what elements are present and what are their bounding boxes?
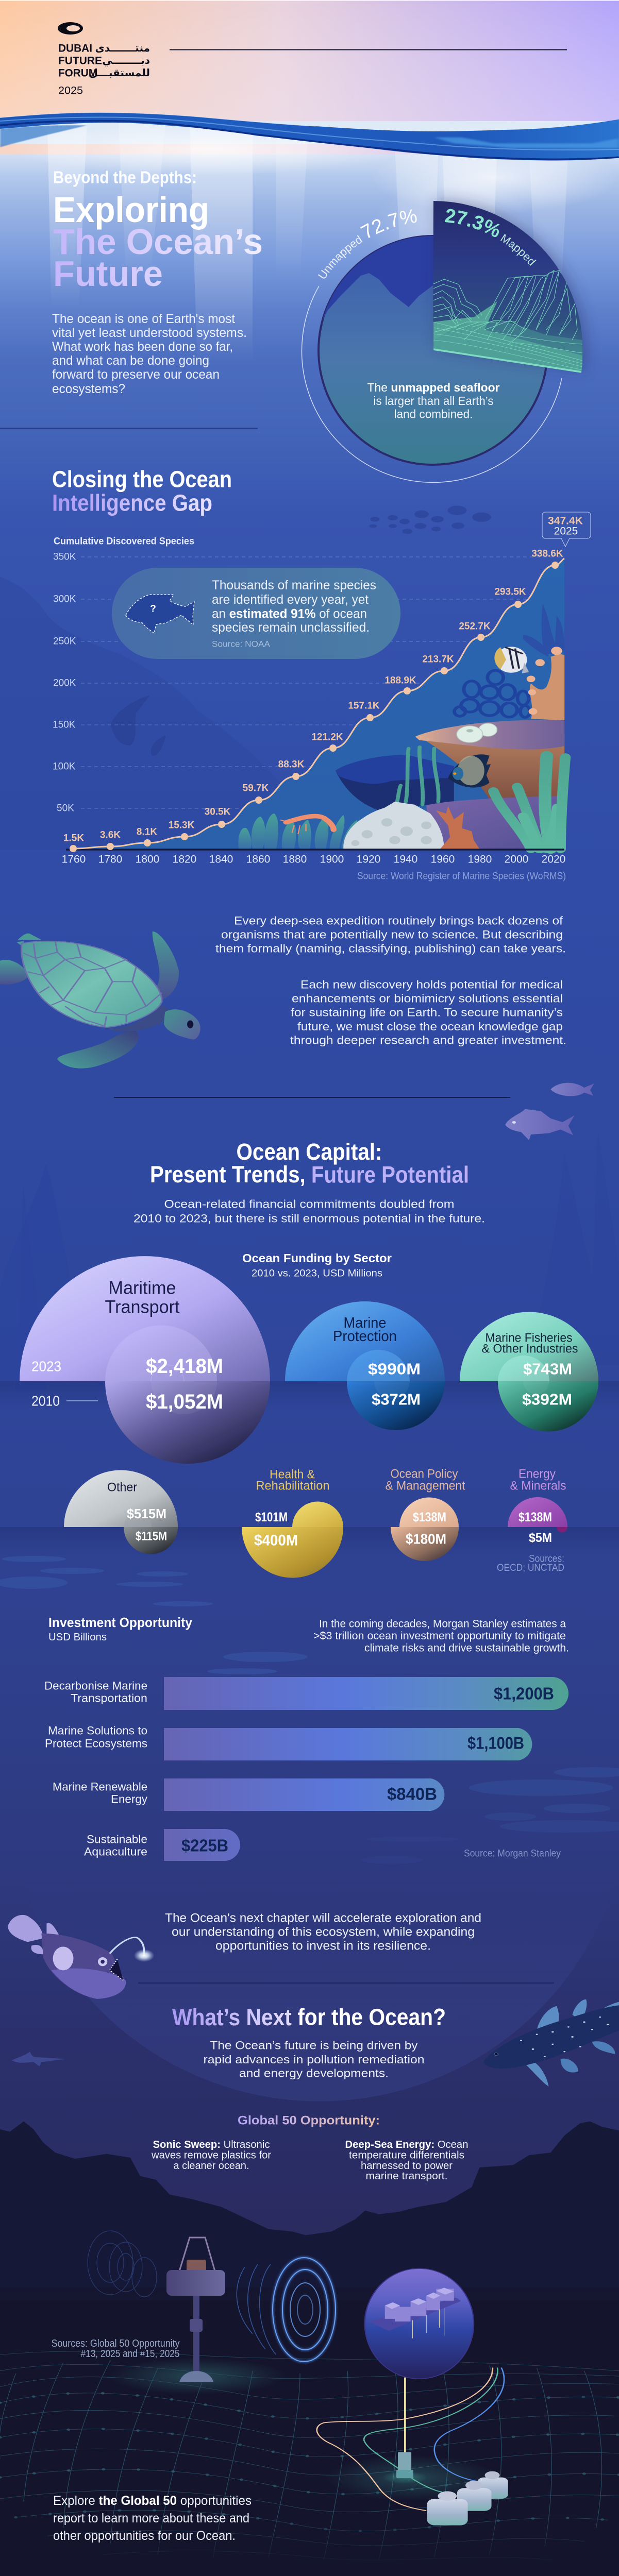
- light rays: [47, 123, 568, 363]
- title block: Beyond the Depths:: [53, 168, 197, 187]
- cables: [317, 2368, 504, 2511]
- reef illustration: [238, 603, 565, 849]
- bar: renewable energy: $840B: [387, 1785, 437, 1803]
- x axis labels: 1920: [357, 853, 380, 866]
- value labels: 59.7K: [243, 783, 269, 793]
- title block: The Ocean’s: [53, 222, 263, 262]
- bar: aquaculture: Aquaculture: [84, 1845, 147, 1858]
- x axis labels: 1780: [98, 853, 122, 866]
- callout text: are identified every year, yet: [212, 592, 369, 607]
- bubble: marine fisheries: Marine Fisheries: [486, 1331, 572, 1345]
- bubble: energy and minerals: Energy: [518, 1467, 556, 1481]
- title block: Future: [53, 253, 163, 294]
- x axis labels: 1980: [468, 853, 492, 866]
- illustration: deep-sea energy: [317, 2268, 508, 2526]
- faint clouds of silt: [0, 1556, 619, 1864]
- bubble: marine protection: Protection: [333, 1328, 397, 1345]
- value labels: 88.3K: [278, 759, 305, 770]
- bubble: maritime transport: Maritime: [108, 1278, 176, 1298]
- explore text: report to learn more about these and: [53, 2511, 249, 2526]
- logo: Dubai Future Forum 2025: [58, 22, 150, 97]
- x axis labels: 2000: [505, 853, 528, 866]
- background rock silhouette: [0, 577, 304, 850]
- y axis labels: 250K: [53, 636, 76, 647]
- bubble: health and rehabilitation: Rehabilitation: [256, 1479, 330, 1493]
- opportunity sources: Sources: Global 50 Opportunity: [52, 2338, 179, 2349]
- central column: [382, 2452, 427, 2484]
- value labels: 121.2K: [311, 732, 343, 743]
- bubble: marine fisheries: & Other Industries: [481, 1342, 578, 1356]
- sensor box: [187, 2260, 206, 2271]
- value labels: 15.3K: [169, 820, 195, 831]
- value labels: 252.7K: [459, 621, 491, 632]
- opportunity: sonic sweep: Sonic Sweep: Ultrasonic: [153, 2139, 270, 2150]
- year bands: [0, 1381, 619, 1410]
- bubble: maritime transport: $1,052M: [146, 1391, 223, 1413]
- sea urchins: [457, 723, 497, 742]
- discovery text: for sustaining life on Earth. To secure humanity’s: [291, 1006, 563, 1019]
- underwater surface glow: [0, 121, 619, 289]
- value labels: 338.6K: [531, 548, 563, 560]
- bar source: Source: Morgan Stanley: [464, 1849, 561, 1859]
- illustration: sonic sweep buoy: [88, 2231, 336, 2382]
- bubble: health and rehabilitation: [242, 1467, 343, 1578]
- callout text: Source: NOAA: [212, 639, 271, 649]
- bubble: other: $515M: [127, 1506, 166, 1521]
- tube sponges: [493, 756, 565, 849]
- bubble: maritime transport: $2,418M: [146, 1355, 223, 1378]
- transition text: opportunities to invest in its resilience.: [215, 1939, 431, 1953]
- bar: marine solutions: [45, 1724, 532, 1760]
- section heading: ocean capital: Present Trends, Future Potential: [150, 1161, 469, 1188]
- sky header: [0, 0, 619, 155]
- funding sources: OECD; UNCTAD: [497, 1563, 564, 1573]
- discovery text: them formally (naming, classifying, publishing) can take years.: [215, 942, 566, 955]
- bubble: marine protection: [285, 1301, 445, 1430]
- bubble: ocean policy and management: Ocean Policy: [391, 1467, 458, 1481]
- deep background: [0, 2287, 619, 2576]
- opportunity: sonic sweep: waves remove plastics for: [151, 2149, 271, 2161]
- bubble: maritime transport: [20, 1256, 270, 1464]
- section heading: ocean capital: 2010 to 2023, but there is still enormous potential in the future.: [133, 1212, 485, 1225]
- intro paragraph: vital yet least understood systems.: [52, 326, 247, 340]
- seafloor mesh: [0, 2351, 619, 2560]
- x axis labels: 1820: [173, 853, 196, 866]
- mesh glow: [325, 2455, 500, 2501]
- mapped wedge: [433, 200, 586, 374]
- sound waves: [88, 2231, 336, 2362]
- bar: aquaculture: $225B: [181, 1836, 228, 1855]
- bar: renewable energy: Marine Renewable: [53, 1781, 147, 1793]
- x axis labels: 1900: [320, 853, 344, 866]
- y axis labels: [53, 551, 76, 814]
- callout text: species remain unclassified.: [212, 620, 370, 635]
- transition text: our understanding of this ecosystem, while expanding: [172, 1925, 475, 1939]
- investment opportunity heading: USD Billions: [48, 1632, 107, 1643]
- opportunity sources: #13, 2025 and #15, 2025: [80, 2348, 179, 2360]
- disc caption: [367, 381, 500, 420]
- funding sources: [497, 1554, 564, 1573]
- value labels: 293.5K: [494, 586, 526, 598]
- bar: aquaculture: [84, 1829, 240, 1861]
- discovery text: through deeper research and greater investment.: [290, 1033, 566, 1047]
- investment intro text: [313, 1618, 569, 1654]
- x axis labels: [62, 853, 565, 866]
- value labels: 1.5K: [63, 833, 84, 844]
- value labels: 157.1K: [348, 701, 380, 711]
- illustration: coelacanth: [483, 1999, 619, 2087]
- joint: [190, 2319, 203, 2332]
- explore text: [53, 2494, 252, 2543]
- power sphere: [365, 2268, 474, 2379]
- unmapped disc: [309, 222, 547, 465]
- section heading: closing the gap: [52, 466, 232, 516]
- bar: marine solutions: Protect Ecosystems: [45, 1737, 147, 1750]
- bubble: maritime transport: 2010: [31, 1393, 60, 1409]
- bubble: energy and minerals: [508, 1467, 567, 1545]
- angelfish: [448, 754, 491, 788]
- discovery text: future, we must close the ocean knowledge gap: [297, 1020, 563, 1033]
- section heading: ocean capital: Ocean-related financial commitments doubled from: [164, 1197, 455, 1211]
- x axis labels: 1960: [431, 853, 455, 866]
- explore text: other opportunities for our Ocean.: [53, 2529, 236, 2543]
- icon: mystery fish: ?: [150, 604, 156, 614]
- section heading: closing the gap: Closing the Ocean: [52, 466, 232, 493]
- seafloor mapping pie chart: [301, 192, 591, 483]
- section heading: closing the gap: Intelligence Gap: [52, 489, 212, 516]
- branching coral: [527, 647, 564, 720]
- discovery text: Every deep-sea expedition routinely brings back dozens of: [234, 914, 563, 927]
- illustration: large fish: [505, 1109, 574, 1140]
- value labels: 188.9K: [384, 675, 416, 686]
- intro paragraph: The ocean is one of Earth's most: [52, 312, 235, 326]
- y axis labels: 50K: [57, 803, 74, 814]
- funding chart heading: Ocean Funding by Sector: [242, 1251, 392, 1265]
- x axis labels: 1940: [394, 853, 417, 866]
- chart title: Cumulative Discovered Species: [54, 536, 194, 547]
- opportunity: deep-sea energy: temperature differentials: [349, 2149, 464, 2161]
- low seaweed bed: [238, 814, 358, 849]
- bar: decarbonise: Decarbonise Marine: [44, 1680, 147, 1692]
- section heading: what's next: [172, 2004, 446, 2079]
- y axis labels: 150K: [53, 719, 76, 731]
- icon: mystery fish: [126, 595, 194, 633]
- bar: decarbonise: $1,200B: [494, 1684, 554, 1703]
- illustration: sea turtle: [0, 931, 200, 1069]
- y axis labels: 100K: [53, 761, 76, 772]
- white coral: [343, 802, 444, 849]
- logo: Dubai Future Forum 2025: FUTURE: [58, 55, 102, 67]
- bubble: marine protection: $990M: [368, 1360, 421, 1378]
- disc caption: is larger than all Earth’s: [373, 394, 494, 408]
- bar: decarbonise: [44, 1677, 568, 1710]
- bubble: other: [64, 1470, 178, 1554]
- 2025 callout: [542, 512, 591, 547]
- turbine tanks: [427, 2471, 508, 2526]
- buoy body: [166, 2270, 225, 2296]
- water surface wave: [0, 112, 619, 161]
- discovery text: organisms that are potentially new to science. But describing: [221, 928, 563, 941]
- intro paragraph: ecosystems?: [52, 382, 125, 396]
- orange coral: [436, 806, 480, 849]
- x axis labels: 1760: [62, 853, 86, 866]
- disc caption: The unmapped seafloor: [367, 381, 500, 394]
- bubble: energy and minerals: $138M: [518, 1510, 552, 1524]
- bar: renewable energy: [53, 1778, 444, 1811]
- pale disc behind what's next: [23, 1880, 616, 2102]
- base dome: [179, 2371, 213, 2382]
- bubble: marine fisheries: $743M: [523, 1360, 572, 1378]
- bubble: ocean policy and management: $138M: [413, 1510, 446, 1524]
- value labels: 8.1K: [137, 826, 157, 838]
- disc caption: land combined.: [394, 407, 473, 420]
- unmapped arc label: Unmapped 72.7%: [318, 209, 417, 279]
- x axis labels: 2020: [542, 853, 565, 866]
- dark boulder: [336, 755, 454, 810]
- logo: Dubai Future Forum 2025: 2025: [58, 84, 83, 97]
- section heading: what's next: and energy developments.: [239, 2067, 389, 2079]
- funding chart heading: 2010 vs. 2023, USD Millions: [252, 1268, 382, 1279]
- investment intro text: climate risks and drive sustainable growth.: [364, 1642, 569, 1654]
- transition text: [165, 1911, 481, 1953]
- intro paragraph: and what can be done going: [52, 353, 209, 368]
- bubble: health and rehabilitation: $400M: [254, 1532, 298, 1549]
- investment intro text: In the coming decades, Morgan Stanley estimates a: [319, 1618, 566, 1630]
- bar: marine solutions: $1,100B: [467, 1733, 524, 1753]
- bubble: other: Other: [107, 1481, 137, 1494]
- bar: decarbonise: Transportation: [71, 1692, 147, 1704]
- mapped arc label: 27.3% Mapped: [445, 209, 537, 266]
- logo: Dubai Future Forum 2025: DUBAI: [58, 42, 92, 55]
- section heading: what's next: The Ocean’s future is being driven by: [210, 2039, 417, 2052]
- logo: Dubai Future Forum 2025: منتـــــــدى: [95, 43, 150, 54]
- transition text: The Ocean's next chapter will accelerate exploration and: [165, 1911, 481, 1925]
- pole: [193, 2296, 199, 2371]
- x axis labels: 1860: [246, 853, 270, 866]
- intro paragraph: What work has been done so far,: [52, 340, 233, 354]
- investment opportunity heading: Investment Opportunity: [48, 1615, 193, 1630]
- callout text: an estimated 91% of ocean: [212, 607, 367, 621]
- x axis labels: 1880: [283, 853, 307, 866]
- bubble: marine fisheries: [460, 1312, 598, 1431]
- lattice coral: [455, 670, 530, 717]
- bubble: maritime transport: Transport: [105, 1297, 180, 1317]
- illustration: shark silhouette: [12, 2052, 65, 2066]
- discovery text: [215, 914, 566, 1047]
- bubble: ocean policy and management: $180M: [406, 1531, 446, 1547]
- area under curve: [73, 558, 564, 850]
- x axis labels: 1800: [136, 853, 159, 866]
- background seaweed: [0, 1131, 619, 1391]
- y axis labels: 300K: [53, 594, 76, 605]
- bar chart: investment: [44, 1677, 568, 1861]
- opportunity: deep-sea energy: Deep-Sea Energy: Ocean: [345, 2139, 468, 2150]
- logo: Dubai Future Forum 2025: للمستقبـــل: [89, 67, 150, 79]
- section heading: what's next: rapid advances in pollution remediation: [203, 2053, 425, 2066]
- 2025 callout: 347.4K: [548, 515, 583, 527]
- y axis labels: 200K: [53, 678, 76, 688]
- global 50 opportunity text: Global 50 Opportunity:: [238, 2113, 380, 2128]
- intro paragraph: [52, 312, 247, 396]
- section heading: ocean capital: Ocean Capital:: [236, 1139, 382, 1165]
- bar: renewable energy: Energy: [111, 1793, 147, 1805]
- bubble: energy and minerals: $5M: [529, 1531, 552, 1545]
- callout: unclassified species: [112, 568, 400, 659]
- opportunity: sonic sweep: a cleaner ocean.: [173, 2160, 249, 2172]
- discovery text: enhancements or biomimicry solutions essential: [292, 992, 563, 1005]
- explore text: Explore the Global 50 opportunities: [53, 2494, 252, 2508]
- bar: marine solutions: Marine Solutions to: [48, 1724, 147, 1737]
- illustration: small fish: [550, 1083, 594, 1096]
- opportunity: deep-sea energy: marine transport.: [366, 2171, 447, 2182]
- logo: Dubai Future Forum 2025: دبــــــــي: [102, 55, 150, 67]
- bubble: ocean policy and management: & Management: [386, 1479, 465, 1493]
- shrimp: [280, 816, 333, 834]
- chart source: Source: World Register of Marine Species (WoRMS): [357, 871, 566, 882]
- illustration: anglerfish: [8, 1915, 154, 1999]
- bubble: energy and minerals: & Minerals: [510, 1479, 566, 1493]
- bubble: health and rehabilitation: Health &: [270, 1467, 315, 1482]
- intro paragraph: forward to preserve our ocean: [52, 367, 220, 382]
- table rock: [415, 720, 564, 805]
- opportunity: deep-sea energy: harnessed to power: [361, 2160, 453, 2172]
- bubble: marine protection: Marine: [343, 1315, 387, 1331]
- butterflyfish: [494, 647, 529, 673]
- outer ring: [302, 286, 562, 482]
- opportunity sources: [52, 2338, 179, 2360]
- title block: [53, 168, 263, 294]
- bubble: maritime transport: 2023: [31, 1358, 61, 1375]
- species discovery chart: [53, 512, 591, 882]
- value labels: 213.7K: [422, 654, 454, 665]
- dark seaweed: [523, 603, 564, 657]
- value labels: 3.6K: [100, 829, 121, 841]
- funding sources: Sources:: [529, 1554, 564, 1564]
- school of fish silhouette: [369, 505, 491, 534]
- x axis labels: 1840: [209, 853, 233, 866]
- investment intro text: >$3 trillion ocean investment opportunity to mitigate: [313, 1630, 566, 1642]
- callout text: Thousands of marine species: [212, 578, 376, 592]
- logo: Dubai Future Forum 2025: FORUM: [58, 67, 97, 79]
- bubble: marine fisheries: $392M: [522, 1390, 572, 1409]
- axis baseline: [66, 849, 564, 851]
- bubble: marine protection: $372M: [372, 1390, 421, 1409]
- section heading: what's next: What’s Next for the Ocean?: [172, 2004, 446, 2030]
- opportunity: sonic sweep: [151, 2139, 271, 2172]
- growth curve: [73, 558, 564, 849]
- y axis labels: 350K: [53, 551, 76, 563]
- value labels: [63, 548, 563, 844]
- section heading: ocean capital: [133, 1139, 485, 1225]
- investment opportunity heading: [48, 1615, 193, 1643]
- dark seafloor mountains: [0, 2122, 619, 2300]
- 2025 callout: 2025: [554, 526, 578, 537]
- discovery text: Each new discovery holds potential for medical: [300, 978, 563, 991]
- curve markers: [70, 562, 559, 852]
- bubble: health and rehabilitation: $101M: [255, 1510, 288, 1524]
- bar: aquaculture: Sustainable: [87, 1833, 147, 1845]
- title block: Exploring: [53, 190, 209, 230]
- sea grass: [397, 747, 439, 805]
- bubble: ocean policy and management: [386, 1467, 465, 1561]
- opportunity: deep-sea energy: [345, 2139, 468, 2182]
- value labels: 30.5K: [205, 807, 231, 817]
- bubble: other: $115M: [136, 1529, 167, 1544]
- callout text: [212, 578, 376, 649]
- buoy tower: [179, 2238, 215, 2271]
- global 50 opportunity text: [151, 2113, 468, 2182]
- purple seabed: [426, 796, 564, 849]
- funding chart heading: [242, 1251, 392, 1279]
